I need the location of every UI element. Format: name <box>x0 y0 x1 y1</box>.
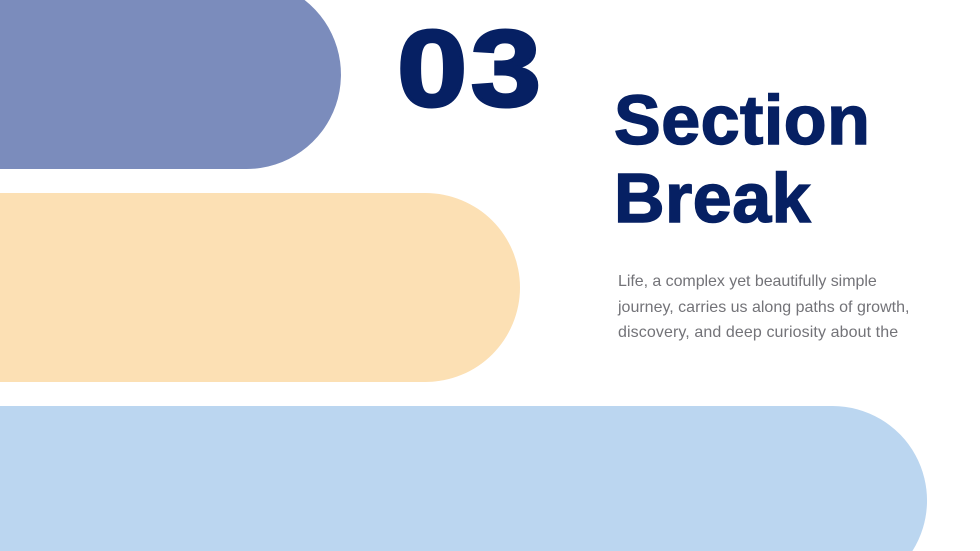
body text: discovery, and deep curiosity about the <box>618 324 898 341</box>
heading: Break <box>614 159 811 237</box>
section number: 03 <box>397 8 545 130</box>
heading: Section <box>614 81 870 159</box>
body text: journey, carries us along paths of growth, <box>618 299 909 316</box>
light blue rounded bar <box>0 406 927 551</box>
body text <box>618 273 909 341</box>
peach rounded bar <box>0 193 520 382</box>
heading <box>614 81 870 237</box>
body text: Life, a complex yet beautifully simple <box>618 273 877 290</box>
purple rounded bar <box>0 0 341 169</box>
